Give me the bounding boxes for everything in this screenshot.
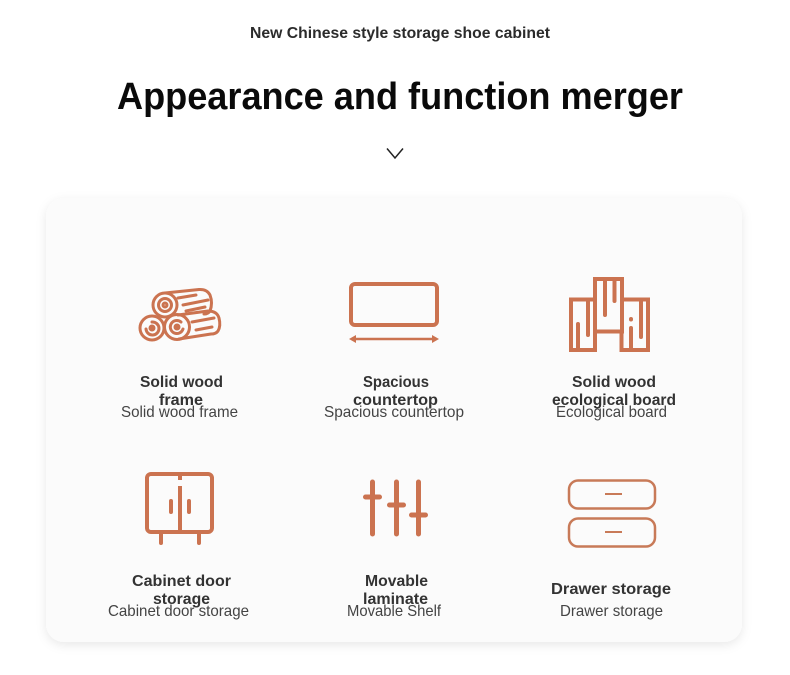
heading: Cabinet door [132, 573, 231, 590]
subtitle: New Chinese style storage shoe cabinet [250, 25, 551, 42]
icon: countertop with width arrow [349, 284, 439, 343]
feature: ecological board [552, 279, 676, 421]
heading: Solid wood [572, 374, 656, 391]
panel background [46, 198, 742, 642]
caption: Cabinet door storage [108, 603, 249, 620]
feature: spacious countertop [324, 284, 464, 421]
icon: cabinet [147, 474, 212, 543]
caption: Solid wood frame [121, 404, 238, 421]
icon: drawers [569, 480, 655, 546]
icon: wood boards [571, 279, 648, 350]
heading: Solid wood [140, 374, 223, 391]
caption: Movable Shelf [347, 603, 442, 620]
heading: Spacious [363, 374, 429, 391]
feature: cabinet door storage [108, 474, 249, 620]
heading: Movable [365, 573, 428, 590]
title: Appearance and function merger [117, 76, 683, 118]
caption: Drawer storage [560, 603, 663, 620]
icon: sliders [366, 482, 426, 534]
heading line 2: countertop [353, 392, 438, 409]
heading line 2: storage [153, 591, 210, 608]
heading: Drawer storage [551, 581, 671, 598]
heading line 2: frame [159, 392, 203, 409]
heading line 2: ecological board [552, 392, 676, 409]
heading line 2: laminate [363, 591, 428, 608]
icon: wood logs [140, 289, 220, 340]
feature: drawer storage [551, 480, 671, 620]
caption: Ecological board [556, 404, 667, 421]
caption: Spacious countertop [324, 404, 464, 421]
icon: chevron down [387, 148, 403, 158]
panel: features [46, 198, 742, 642]
feature: solid wood frame [121, 289, 238, 421]
feature: movable shelf [347, 482, 442, 620]
